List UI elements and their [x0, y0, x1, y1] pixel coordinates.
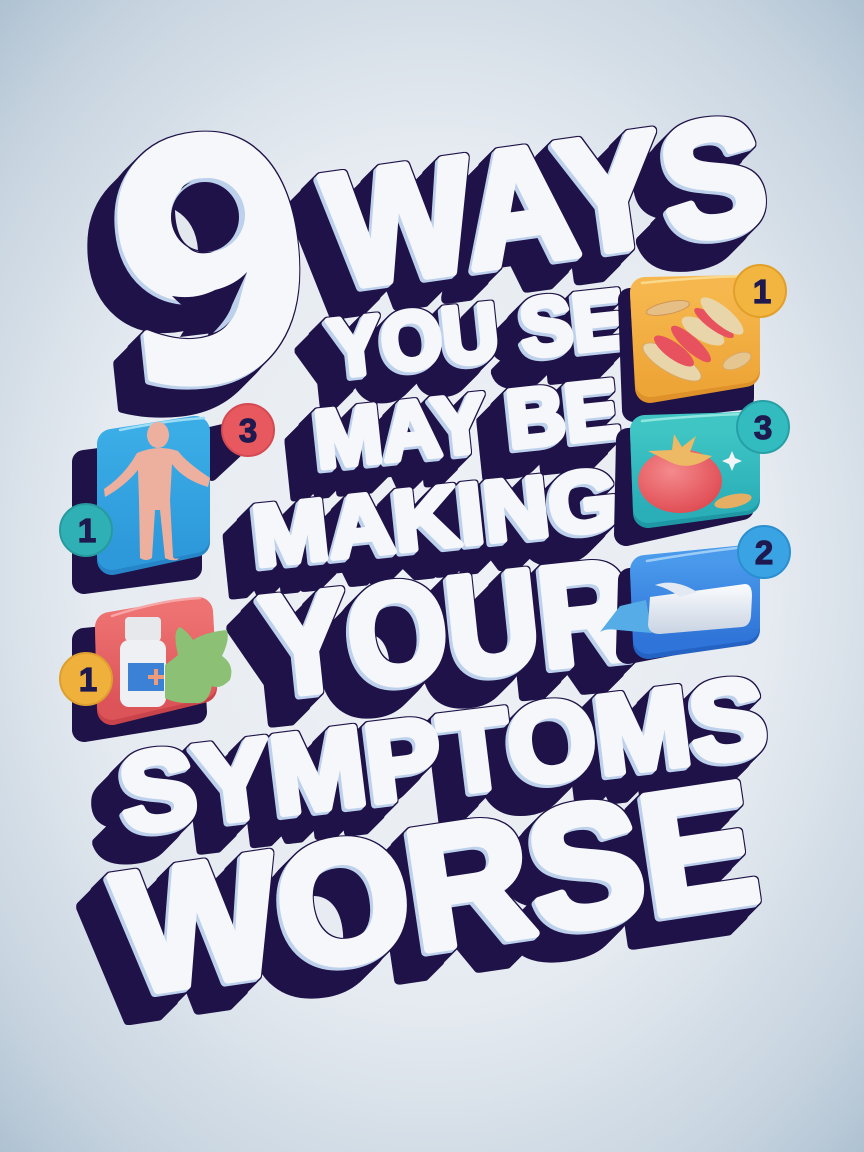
- badge number: 3: [239, 412, 257, 449]
- badge number: [60, 504, 112, 556]
- title: YOUR: YOUR: [255, 530, 639, 727]
- badge number: 1: [78, 512, 96, 549]
- badge number: [222, 404, 274, 456]
- badge number: [60, 653, 112, 705]
- title: SYMPTOMS: SYMPTOMS: [113, 654, 773, 857]
- title: big number 9: 9: [91, 64, 334, 463]
- badge number: 3: [754, 409, 772, 446]
- badge number: 2: [755, 534, 773, 571]
- badge number: [738, 526, 790, 578]
- icon: medicine card with badge 1: [60, 598, 231, 730]
- badge number: 1: [753, 273, 771, 310]
- icon: body card with badges 3 and 1: [60, 404, 274, 582]
- icon: tomato card with badge 3: [626, 401, 789, 534]
- title: WAYS: WAYS: [316, 82, 777, 323]
- title: MAY BE: MAY BE: [310, 364, 623, 486]
- icon: tube card with badge 2: [600, 526, 790, 652]
- figure: [104, 422, 210, 560]
- title: YOU SE: YOU SE: [324, 273, 629, 395]
- badge number: 1: [79, 661, 97, 698]
- badge number: [737, 401, 789, 453]
- title: WORSE: WORSE: [105, 746, 768, 1031]
- icon: food plate with badge 1: [630, 265, 786, 410]
- title: MAKING: MAKING: [248, 451, 624, 585]
- counter of the 9: [171, 178, 247, 337]
- badge number: [734, 265, 786, 317]
